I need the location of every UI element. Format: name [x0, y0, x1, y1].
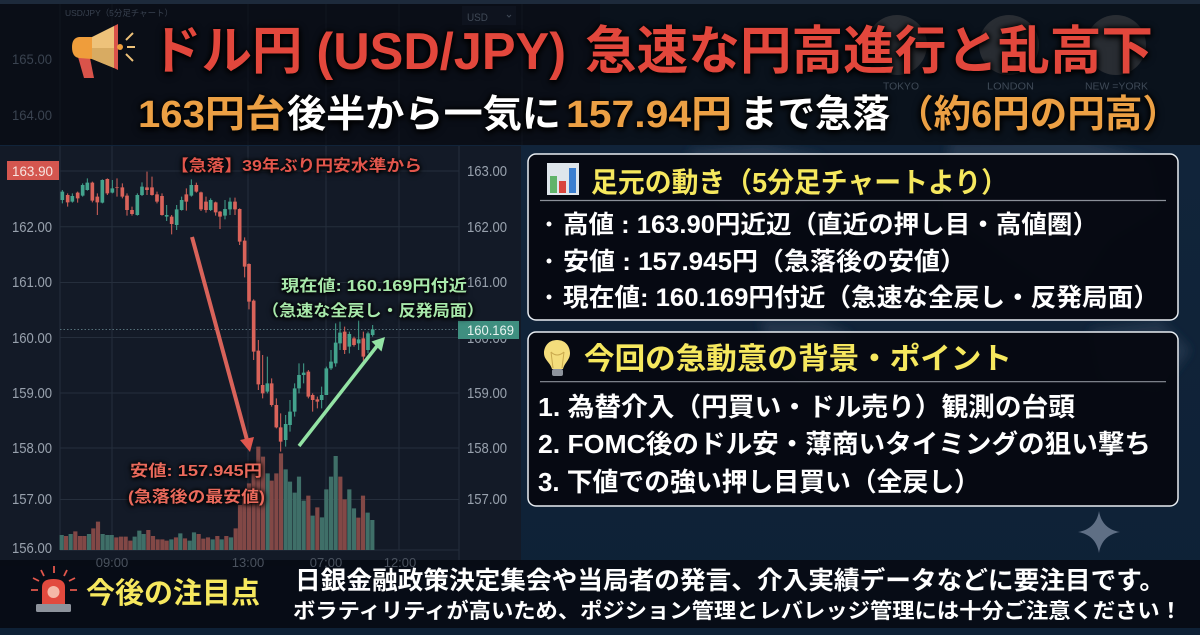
footer text: ボラティリティが高いため、ポジション管理とレバレッジ管理には十分ご注意ください！	[293, 599, 1182, 623]
icon: sparkle	[1078, 511, 1120, 553]
subtitle: まで急落	[740, 94, 890, 136]
y axis labels left: 159.00	[12, 385, 52, 402]
x axis labels: 07:00	[310, 555, 342, 570]
arrow: green rebound	[299, 337, 385, 446]
y axis labels right: 160.00	[467, 330, 507, 347]
source chart caption: USD/JPY（5分足チャート）	[65, 8, 173, 18]
icon: megaphone	[72, 24, 135, 78]
subtitle: 163円台	[138, 94, 285, 136]
chart label: current value: 現在値: 160.169円付近	[281, 276, 467, 295]
subtitle	[138, 94, 1180, 136]
title	[151, 23, 1153, 81]
movement list: 高値 : 163.90円近辺（直近の押し目・高値圏）	[563, 211, 1098, 239]
decorative world map	[690, 136, 1190, 390]
movement list: 現在値: 160.169円付近（急速な全戻し・反発局面）	[563, 284, 1159, 312]
movement list: 安値 : 157.945円（急落後の安値）	[563, 248, 966, 276]
y axis labels right: 161.00	[467, 274, 507, 291]
chart label: low value	[128, 461, 265, 506]
point list: 3. 下値での強い押し目買い（全戻し）	[538, 467, 980, 497]
y axis labels left	[12, 219, 52, 557]
y axis labels left: 156.00	[12, 540, 52, 557]
y axis labels left: 158.00	[12, 440, 52, 457]
title: 急速な円高進行と乱高下	[585, 23, 1153, 81]
x axis labels: 13:00	[232, 555, 264, 570]
chart label: sharp drop: 【急落】39年ぶり円安水準から	[171, 156, 422, 175]
current price dotted line	[60, 328, 458, 330]
y axis labels right: 159.00	[467, 385, 507, 402]
point list: 1. 為替介入（円買い・ドル売り）観測の台頭	[538, 392, 1075, 422]
chart label: low value: 安値: 157.945円	[130, 461, 262, 480]
world clocks: LONDON	[987, 82, 1034, 92]
y axis labels right: 163.00	[467, 163, 507, 180]
chart label: low value: (急落後の最安値)	[128, 487, 265, 506]
high price tag	[7, 161, 59, 180]
y axis labels right	[467, 163, 507, 508]
panel: background points	[528, 332, 1178, 506]
subtitle: （約6円の円高）	[896, 94, 1180, 136]
y axis labels right: 162.00	[467, 219, 507, 236]
footer band	[0, 555, 1200, 628]
high price tag: 163.90	[12, 163, 53, 179]
currency selector: USD	[467, 12, 488, 24]
upper axis labels	[12, 51, 52, 123]
icon: light bulb	[544, 340, 570, 376]
subtitle: 157.94円	[566, 94, 732, 136]
arrow: red decline	[192, 237, 254, 452]
icon: siren	[31, 566, 77, 612]
icon: bar chart	[547, 163, 579, 195]
chart grid	[60, 146, 459, 566]
movement list	[546, 211, 1159, 312]
volume bars	[62, 447, 372, 550]
point list	[538, 392, 1151, 497]
chart panel	[0, 146, 521, 566]
title: ドル円 (USD/JPY)	[151, 23, 566, 81]
chart label: current value: （急速な全戻し・反発局面）	[262, 301, 484, 320]
panel heading: 足元の動き（5分足チャートより）	[591, 167, 1008, 198]
y axis labels right: 158.00	[467, 440, 507, 457]
world clocks: NEW =YORK	[1085, 82, 1148, 92]
y axis labels left: 157.00	[12, 491, 52, 508]
x axis labels: 09:00	[96, 555, 128, 570]
y axis labels left: 161.00	[12, 274, 52, 291]
current price tag: 160.169	[467, 322, 514, 338]
y axis labels left: 162.00	[12, 219, 52, 236]
y axis labels right: 157.00	[467, 491, 507, 508]
upper axis labels: 164.00	[12, 107, 52, 123]
y axis labels left: 160.00	[12, 330, 52, 347]
candlesticks	[62, 172, 373, 452]
currency selector	[462, 6, 516, 25]
world clocks	[867, 15, 1148, 92]
footer text	[293, 566, 1182, 623]
subtitle: 後半から一気に	[287, 94, 561, 136]
upper axis labels: 165.00	[12, 51, 52, 67]
x axis labels	[96, 555, 416, 570]
footer heading: 今後の注目点	[86, 577, 260, 610]
x axis labels: 12:00	[384, 555, 416, 570]
point list: 2. FOMC後のドル安・薄商いタイミングの狙い撃ち	[538, 429, 1151, 459]
chart label: current value	[262, 276, 484, 320]
panel heading: 今回の急動意の背景・ポイント	[584, 343, 1012, 376]
panel: recent movement	[528, 154, 1178, 320]
world clocks: TOKYO	[883, 82, 919, 92]
header band	[0, 0, 1200, 145]
footer text: 日銀金融政策決定集会や当局者の発言、介入実績データなどに要注目です。	[295, 566, 1165, 595]
